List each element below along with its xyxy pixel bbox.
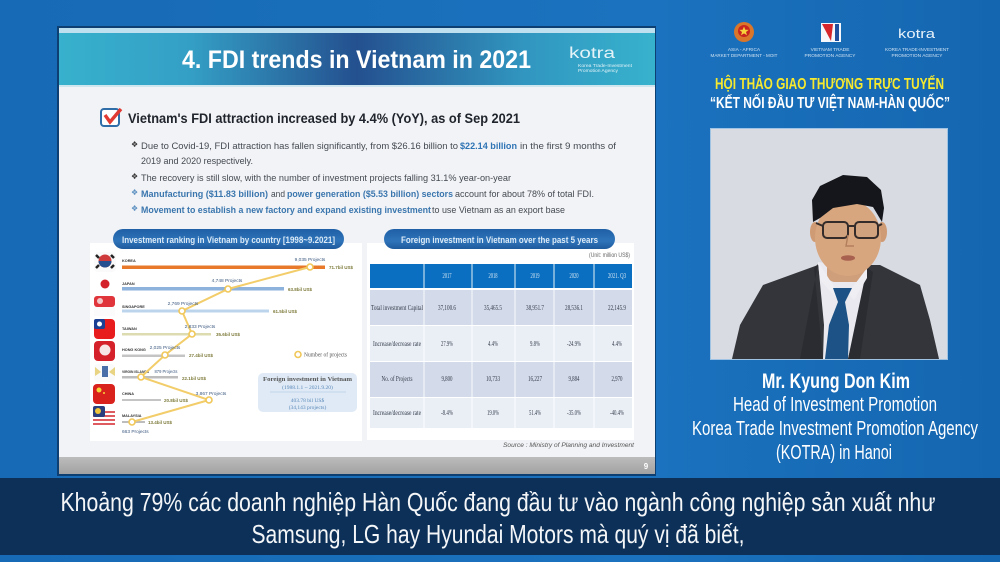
project count labels: 663 Projects [122, 429, 149, 435]
unit note: (Unit: million US$) [589, 252, 630, 259]
speaker portrait [732, 175, 939, 359]
slide title: 4. FDI trends in Vietnam in 2021 [182, 46, 531, 74]
data table: 2019 [530, 272, 540, 280]
data table: -40.4% [610, 408, 624, 417]
country flags [93, 252, 116, 426]
country labels: JAPAN [122, 282, 135, 286]
ranking heading pill [113, 229, 344, 249]
speaker role [692, 394, 978, 464]
investment value labels: 13.4bil US$ [148, 420, 173, 425]
investment value labels: 22.1bil US$ [182, 376, 207, 381]
speaker credentials [692, 370, 978, 464]
callout: foreign investment total: (34,143 projects) [289, 404, 326, 411]
data table: 19.0% [487, 408, 499, 417]
project count labels: 4,748 Projects [212, 278, 243, 284]
bullet list: $22.14 billion [460, 141, 517, 152]
investment value labels: 35.6bil US$ [216, 332, 241, 337]
bullet list: Movement to establish a new factory and expand existing investment [141, 205, 432, 216]
table heading pill: Foreign investment in Vietnam over the past 5 years [401, 235, 598, 246]
data table: 22,145.9 [608, 303, 626, 312]
bullet list: account for about 78% of total FDI. [455, 189, 594, 200]
country labels [122, 259, 149, 418]
speaker name: Mr. Kyung Don Kim [762, 370, 910, 393]
data table: 9,800 [442, 374, 453, 383]
kotra logo [569, 45, 633, 73]
kotra logo: kotra [569, 45, 615, 62]
investment value labels: 61.5bil US$ [273, 309, 298, 314]
callout: foreign investment total: (1988.1.1 ~ 2021.9.20) [282, 384, 333, 391]
data table: 2,970 [612, 374, 623, 383]
slide heading: Vietnam's FDI attraction increased by 4.4% (YoY), as of Sep 2021 [128, 110, 520, 126]
data table: -24.9% [567, 339, 581, 348]
investment value labels: 20.8bil US$ [164, 398, 189, 403]
data table: 37,100.6 [438, 303, 456, 312]
investment value labels: 63.8bil US$ [288, 287, 313, 292]
chart legend [295, 352, 348, 358]
speaker video panel [710, 128, 948, 360]
project count labels: 3,867 Projects [196, 391, 227, 397]
data table: 10,733 [486, 374, 500, 383]
data table: Increase/decrease rate [373, 408, 421, 417]
data table: 9,884 [568, 374, 580, 383]
project count labels: 2,769 Projects [168, 301, 199, 307]
slide header band [59, 33, 655, 87]
kotra logo: kotra [898, 27, 935, 41]
data table: Increase/decrease rate [373, 339, 421, 348]
bullet list: ❖ [131, 140, 138, 149]
data table: 2021. Q3 [608, 272, 626, 280]
investment value labels: 71.7bil US$ [329, 265, 354, 270]
speaker role: Head of Investment Promotion [733, 394, 937, 416]
bullet list: Manufacturing ($11.83 billion) [141, 189, 268, 200]
bullet list: in the first 9 months of [520, 141, 616, 152]
bullet list [131, 140, 616, 216]
chart legend: Number of projects [304, 352, 348, 358]
logo captions: MARKET DEPARTMENT - MOIT [710, 53, 778, 59]
data table: 28,536.1 [565, 303, 583, 312]
project count labels: 2,833 Projects [185, 324, 216, 330]
source note: Source : Ministry of Planning and Investment [503, 442, 635, 449]
country labels: TAIWAN [122, 327, 137, 331]
investment bars [122, 266, 325, 423]
logo captions: ASIA - AFRICA [728, 47, 761, 53]
country labels: MALAYSIA [122, 414, 142, 418]
data table: 9.8% [530, 339, 540, 348]
callout: foreign investment total: Foreign investment in Vietnam [263, 376, 353, 383]
data table: 2020 [570, 272, 579, 280]
investment value labels [148, 265, 354, 425]
data table: 2017 [442, 272, 452, 280]
project count labels: 9,035 Projects [295, 257, 326, 263]
event title [710, 74, 950, 112]
callout: foreign investment total [258, 373, 357, 412]
panel: foreign investment table [367, 229, 634, 440]
panel: presentation slide [57, 26, 656, 476]
organiser logos [710, 22, 949, 59]
data table: 4.4% [612, 339, 622, 348]
data table: 51.4% [529, 408, 541, 417]
data table: 38,951.7 [526, 303, 544, 312]
speaker role: (KOTRA) in Hanoi [776, 442, 892, 464]
data table: 4.4% [488, 339, 498, 348]
callout: foreign investment total: 403.78 bil US$ [291, 397, 324, 404]
country labels: SINGAPORE [122, 305, 145, 309]
project count labels: 2,025 Projects [150, 345, 181, 351]
project count labels [122, 257, 326, 435]
bullet list: to use Vietnam as an export base [432, 205, 565, 216]
logo captions: VIETNAM TRADE [811, 47, 849, 53]
caption text [60, 487, 936, 549]
bullet list: 2019 and 2020 respectively. [141, 156, 253, 167]
kotra logo: Promotion Agency [578, 68, 619, 73]
bullet list: ❖ [131, 172, 138, 181]
data table: -8.4% [441, 408, 453, 417]
table heading pill [384, 229, 615, 249]
data table: -35.0% [567, 408, 581, 417]
bullet list: ❖ [131, 204, 138, 213]
country labels: KOREA [122, 259, 136, 263]
logo captions: KOREA TRADE-INVESTMENT [885, 47, 949, 53]
logo captions [710, 47, 949, 59]
data table [370, 264, 632, 428]
icon: state emblem [734, 22, 754, 42]
logo captions: PROMOTION AGENCY [892, 53, 943, 59]
number of projects line [129, 264, 313, 425]
bullet list: Due to Covid-19, FDI attraction has fallen significantly, from $26.16 billion to [141, 141, 458, 152]
data table: Total investment Capital [371, 303, 423, 312]
bullet list: and [271, 189, 285, 200]
slide footer bar [59, 457, 655, 474]
project count labels: 879 Projects [154, 369, 178, 375]
icon: VI logo [821, 23, 841, 42]
logo captions: PROMOTION AGENCY [805, 53, 856, 59]
caption bar [0, 478, 1000, 555]
data table: No. of Projects [382, 374, 413, 383]
caption text: Samsung, LG hay Hyundai Motors mà quý vị đã biết, [252, 519, 744, 549]
data table: 27.9% [441, 339, 453, 348]
country labels: HONG KONG [122, 348, 146, 352]
country labels: CHINA [122, 392, 134, 396]
kotra logo: Korea Trade-Investment [578, 63, 633, 68]
bullet list: The recovery is still slow, with the number of investment projects falling 31.1% year-on-year [141, 173, 511, 184]
investment value labels: 27.4bil US$ [189, 353, 214, 358]
bullet list: ❖ [131, 188, 138, 197]
bullet list: power generation ($5.53 billion) sectors [287, 189, 453, 200]
country labels: VIRGIN ISLANDS [122, 370, 149, 374]
ranking heading pill: Investment ranking in Vietnam by country [1998~9.2021] [122, 235, 335, 246]
data table: 16,227 [528, 374, 542, 383]
data table: 35,465.5 [484, 303, 502, 312]
panel: investment ranking chart [90, 229, 362, 441]
slide footer bar: 9 [644, 462, 649, 471]
icon: red check box [101, 109, 121, 126]
data table: 2018 [488, 272, 498, 280]
